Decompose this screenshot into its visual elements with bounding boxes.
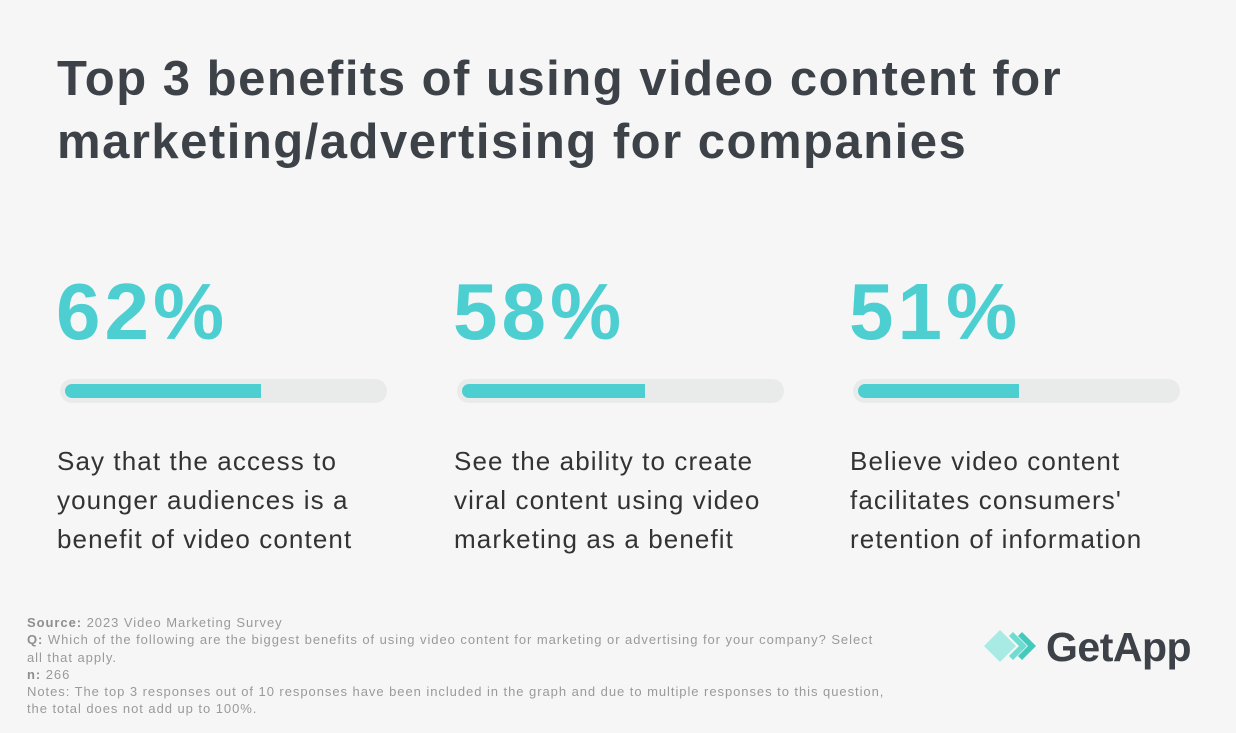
description 3: retention of information — [850, 524, 1142, 554]
description 3 — [850, 446, 1142, 554]
percentage 1: 62% — [56, 267, 228, 356]
title: Top 3 benefits of using video content for — [57, 52, 1062, 106]
description 2: viral content using video — [454, 485, 760, 515]
percentage 2: 58% — [453, 267, 625, 356]
description 2 — [454, 446, 760, 554]
description 2: See the ability to create — [454, 446, 753, 476]
bar 3 — [853, 379, 1180, 403]
logo: GetApp — [984, 624, 1191, 670]
stat 2 — [453, 267, 784, 554]
footer notes: Q: Which of the following are the biggest benefits of using video content for marketing or advertising for your company? Select — [27, 632, 873, 647]
logo text: GetApp — [1046, 624, 1191, 670]
description 1: Say that the access to — [57, 446, 337, 476]
percentage 3: 51% — [849, 267, 1021, 356]
title: marketing/advertising for companies — [57, 115, 967, 169]
description 2: marketing as a benefit — [454, 524, 734, 554]
description 1: younger audiences is a — [57, 485, 349, 515]
stat 1 — [56, 267, 387, 554]
bar 1 — [60, 379, 387, 403]
stat 3 — [849, 267, 1180, 554]
footer notes: n: 266 — [27, 667, 70, 682]
footer notes — [27, 615, 884, 716]
footer notes: Source: 2023 Video Marketing Survey — [27, 615, 283, 630]
description 1: benefit of video content — [57, 524, 352, 554]
bar 2 — [457, 379, 784, 403]
footer notes: the total does not add up to 100%. — [27, 701, 257, 716]
footer notes: all that apply. — [27, 650, 117, 665]
title — [57, 52, 1062, 169]
description 3: Believe video content — [850, 446, 1120, 476]
footer notes: Notes: The top 3 responses out of 10 responses have been included in the graph and due to multiple responses to this question, — [27, 684, 884, 699]
description 1 — [57, 446, 352, 554]
description 3: facilitates consumers' — [850, 485, 1122, 515]
icon: logo diamonds — [984, 630, 1036, 662]
